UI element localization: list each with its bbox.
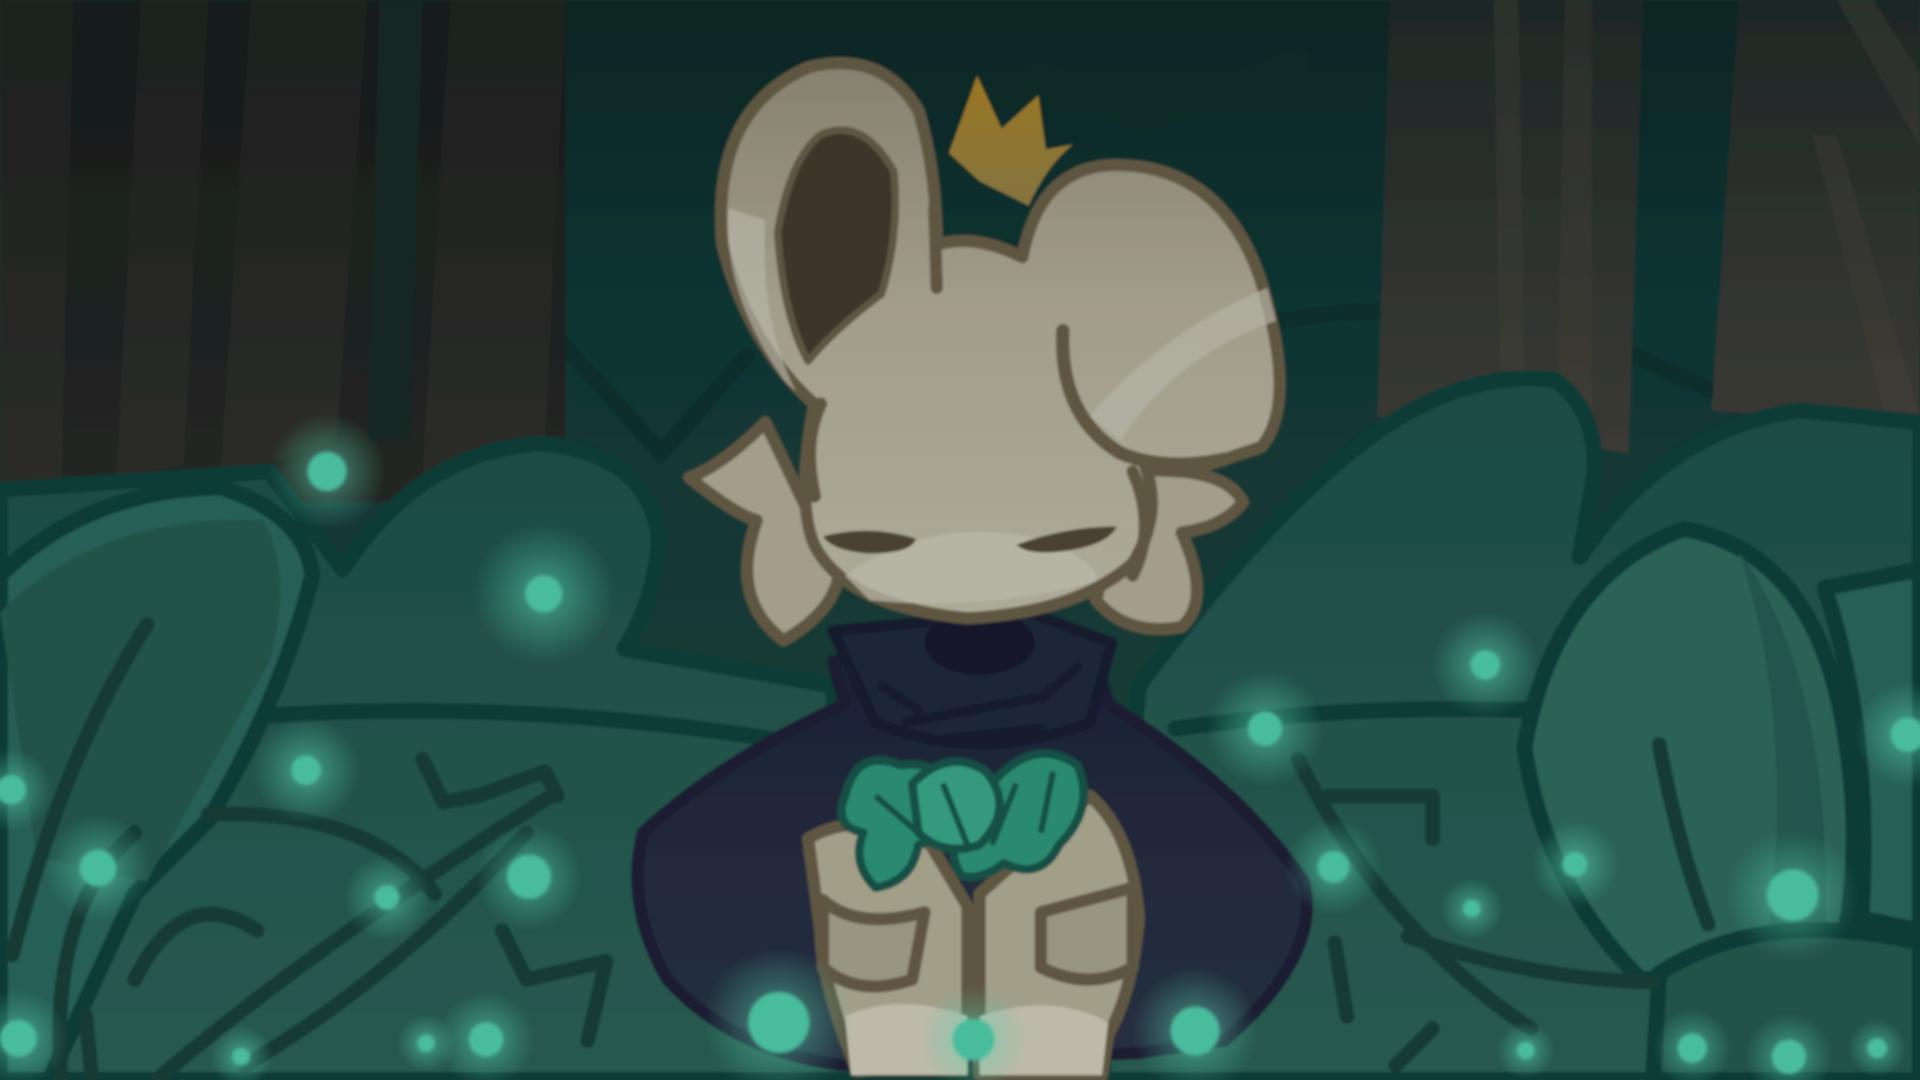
fireflies bbox=[0, 413, 1920, 1080]
creature legs and arms bbox=[808, 796, 1139, 1075]
background vines bbox=[367, 61, 1714, 453]
leaf veins and thorny stems bbox=[12, 624, 1708, 1078]
crown bbox=[949, 76, 1073, 206]
creature bbox=[637, 63, 1307, 1075]
trees: right group bbox=[1378, 0, 1920, 453]
creature cape bbox=[637, 611, 1307, 1065]
bushes: mid-ground horizontal vines bbox=[257, 709, 1531, 741]
bush: left front leaf bbox=[0, 487, 312, 1080]
creature closed eyes bbox=[823, 527, 1117, 553]
creature ears, head and hands bbox=[689, 63, 1280, 640]
bush: right front leaf bbox=[1524, 529, 1920, 1080]
trees: left group bbox=[0, 0, 566, 502]
bushes: back layer bbox=[0, 378, 1920, 1080]
clover bouquet bbox=[841, 754, 1084, 888]
